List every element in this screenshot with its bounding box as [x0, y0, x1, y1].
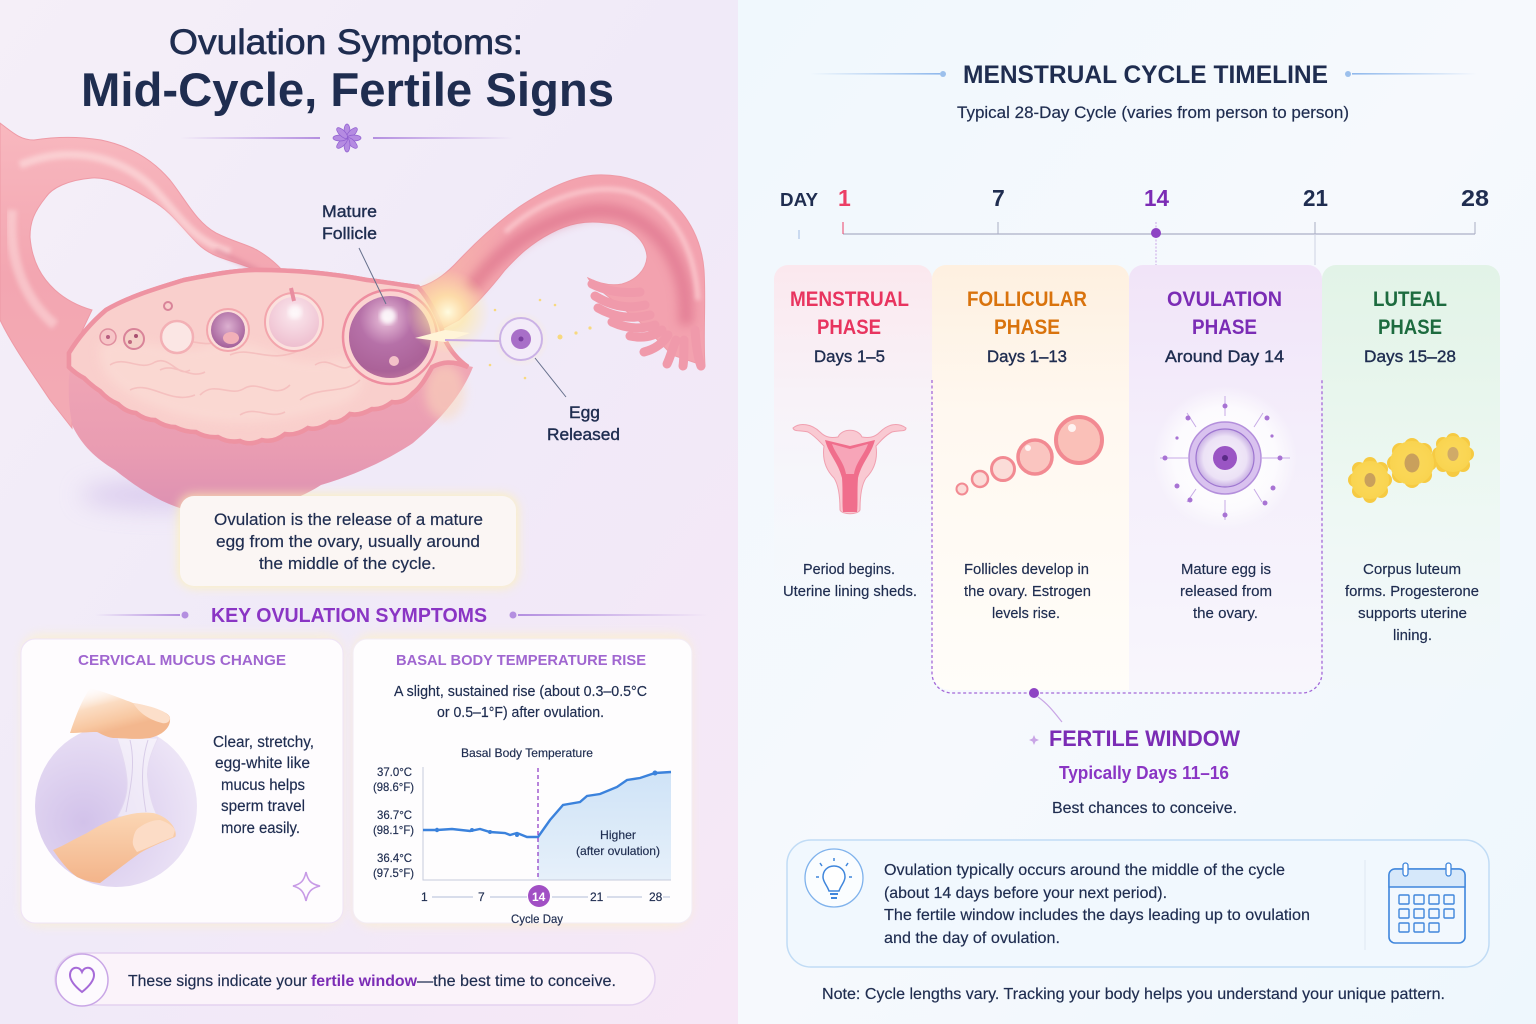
panel: menstrual phase: Period begins. — [803, 561, 895, 578]
label: mature follicle: Follicle — [322, 225, 377, 243]
subtitle: Typical 28-Day Cycle (varies from person to person) — [957, 104, 1349, 122]
illustration: fingers and mucus — [35, 688, 197, 887]
heading: fertile window: FERTILE WINDOW — [1049, 726, 1240, 751]
line chart: basal body temperature: Basal Body Temperature — [461, 746, 593, 760]
developing follicle — [207, 309, 249, 351]
callout: fertile window signs: —the best time to conceive. — [417, 973, 616, 990]
title — [81, 23, 614, 116]
panel: menstrual phase: Days 1–5 — [814, 347, 885, 366]
callout: fertile window signs: fertile window — [311, 973, 418, 990]
panel: cervical mucus change: more easily. — [221, 820, 300, 837]
panel: ovulation note — [787, 840, 1489, 967]
panel: ovulation phase: released from — [1180, 583, 1272, 600]
card heading: BASAL BODY TEMPERATURE RISE — [396, 652, 646, 669]
icon: flower divider — [180, 124, 513, 152]
panel: ovulation phase: PHASE — [1192, 316, 1257, 339]
line chart: basal body temperature: 14 — [532, 890, 546, 904]
callout: fertile window signs — [55, 953, 655, 1006]
ovary lower bowl — [69, 360, 473, 514]
panel: menstrual phase: Uterine lining sheds. — [783, 583, 917, 600]
small follicles — [100, 329, 116, 345]
panel: follicular phase: PHASE — [994, 316, 1060, 339]
right panel background — [738, 0, 1536, 1024]
label: egg released: Egg — [569, 404, 600, 422]
panel: follicular phase: Follicles develop in — [964, 561, 1089, 578]
line chart: basal body temperature: (after ovulation) — [576, 844, 660, 858]
timeline axis: 21 — [1303, 185, 1328, 211]
card heading: CERVICAL MUCUS CHANGE — [78, 652, 286, 669]
left fallopian tube — [0, 123, 296, 428]
panel: luteal phase: lining. — [1393, 627, 1432, 644]
callout: definition: the middle of the cycle. — [259, 555, 436, 573]
callout: definition — [178, 494, 518, 588]
footer note: Note: Cycle lengths vary. Tracking your body helps you understand your unique pattern. — [822, 986, 1445, 1003]
label: egg released — [535, 358, 620, 444]
panel: menstrual phase: PHASE — [817, 316, 881, 339]
fertile window bracket — [932, 380, 1322, 722]
panel: cervical mucus change — [21, 634, 343, 926]
line chart: basal body temperature: 21 — [590, 890, 604, 904]
timeline axis: DAY — [780, 189, 819, 210]
panel: luteal phase: Days 15–28 — [1364, 347, 1456, 366]
line chart: basal body temperature: Higher — [600, 828, 636, 842]
icon: lightbulb — [805, 849, 863, 907]
title: Ovulation Symptoms: — [169, 23, 523, 62]
icon: developing follicles — [956, 417, 1102, 494]
icon: heart — [56, 954, 108, 1006]
panel: luteal phase: Corpus luteum — [1363, 561, 1461, 578]
panel: basal body temperature rise: or 0.5–1°F) after ovulation. — [437, 705, 604, 721]
mature follicle — [343, 290, 437, 384]
title: Mid-Cycle, Fertile Signs — [81, 63, 614, 116]
panel: ovulation phase: Around Day 14 — [1165, 347, 1284, 366]
panel: follicular phase: the ovary. Estrogen — [964, 583, 1091, 600]
heading: menstrual cycle timeline — [810, 61, 1477, 89]
label: mature follicle — [322, 203, 386, 304]
heading: menstrual cycle timeline: MENSTRUAL CYCLE TIMELINE — [963, 61, 1328, 89]
heading: fertile window: Best chances to conceive. — [1052, 800, 1237, 817]
large follicle — [265, 293, 323, 351]
line chart: basal body temperature: 37.0°C — [377, 765, 412, 779]
rupture glow — [406, 270, 490, 354]
panel: luteal phase: LUTEAL — [1373, 288, 1447, 311]
icon: sparkle — [293, 872, 320, 901]
timeline axis: 1 — [838, 185, 851, 211]
heading: fertile window: Typically Days 11–16 — [1059, 763, 1229, 783]
panel: ovulation note: and the day of ovulation. — [884, 930, 1060, 947]
line chart: basal body temperature: 7 — [478, 890, 485, 904]
heading: key ovulation symptoms — [95, 604, 708, 627]
callout: fertile window signs: These signs indicate your — [128, 973, 308, 990]
timeline axis: 28 — [1461, 185, 1489, 211]
ovary cut surface — [69, 270, 468, 443]
panel: cervical mucus change: egg-white like — [215, 755, 310, 772]
panel: follicular phase: levels rise. — [992, 605, 1060, 622]
soft shadow under ovary — [80, 481, 240, 509]
label: mature follicle: Mature — [322, 203, 377, 221]
panel: luteal phase — [1322, 265, 1500, 690]
card text: A slight, sustained rise (about 0.3–0.5°C — [394, 684, 647, 700]
line chart: basal body temperature: (98.6°F) — [373, 780, 414, 794]
panel: ovulation note: Ovulation typically occurs around the middle of the cycle — [884, 862, 1285, 879]
callout: definition: egg from the ovary, usually around — [216, 533, 480, 551]
icon: mature egg — [1153, 386, 1297, 530]
label: egg released: Released — [547, 426, 620, 444]
panel: cervical mucus change: mucus helps — [221, 777, 305, 794]
timeline axis: 14 — [1144, 185, 1169, 211]
panel: follicular phase: FOLLICULAR — [967, 288, 1087, 311]
icon: calendar — [1389, 863, 1465, 943]
right fallopian tube — [420, 175, 705, 366]
timeline axis — [780, 185, 1489, 265]
line chart: basal body temperature: 28 — [649, 890, 663, 904]
line chart: basal body temperature: 1 — [421, 890, 428, 904]
released egg — [493, 311, 549, 367]
panel: menstrual phase — [774, 265, 932, 640]
panel: follicular phase — [932, 265, 1129, 690]
line chart: basal body temperature: 36.7°C — [377, 808, 412, 822]
panel: ovulation phase: Mature egg is — [1181, 561, 1271, 578]
timeline axis: 7 — [992, 185, 1005, 211]
line chart: basal body temperature — [373, 746, 671, 926]
callout: definition: Ovulation is the release of a mature — [214, 511, 483, 529]
line chart: basal body temperature: Cycle Day — [511, 912, 563, 926]
panel: ovulation phase: OVULATION — [1167, 288, 1282, 311]
heading: fertile window — [1029, 726, 1240, 817]
panel: luteal phase: forms. Progesterone — [1345, 583, 1479, 600]
ovary anatomy illustration — [0, 123, 705, 514]
panel: luteal phase: PHASE — [1378, 316, 1442, 339]
left panel background — [0, 0, 738, 1024]
icon: uterus — [793, 425, 906, 514]
line chart: basal body temperature: (98.1°F) — [373, 823, 414, 837]
line chart: basal body temperature: 36.4°C — [377, 851, 412, 865]
line chart: basal body temperature: (97.5°F) — [373, 866, 414, 880]
panel: ovulation phase: the ovary. — [1193, 605, 1258, 622]
panel: follicular phase: Days 1–13 — [987, 347, 1067, 366]
heading: key ovulation symptoms: KEY OVULATION SYMPTOMS — [211, 604, 487, 627]
panel: ovulation note: (about 14 days before your next period). — [884, 885, 1167, 902]
panel: menstrual phase: MENSTRUAL — [790, 288, 909, 311]
panel: ovulation phase — [1129, 265, 1322, 690]
sparkles — [489, 299, 592, 379]
card text: Clear, stretchy, — [213, 734, 314, 751]
fimbriae — [592, 284, 701, 366]
panel: cervical mucus change: sperm travel — [221, 798, 305, 815]
panel: ovulation note: The fertile window includes the days leading up to ovulation — [884, 907, 1310, 924]
panel: luteal phase: supports uterine — [1358, 605, 1467, 622]
panel: basal body temperature rise — [353, 634, 692, 926]
icon: corpus luteum — [1348, 433, 1474, 503]
